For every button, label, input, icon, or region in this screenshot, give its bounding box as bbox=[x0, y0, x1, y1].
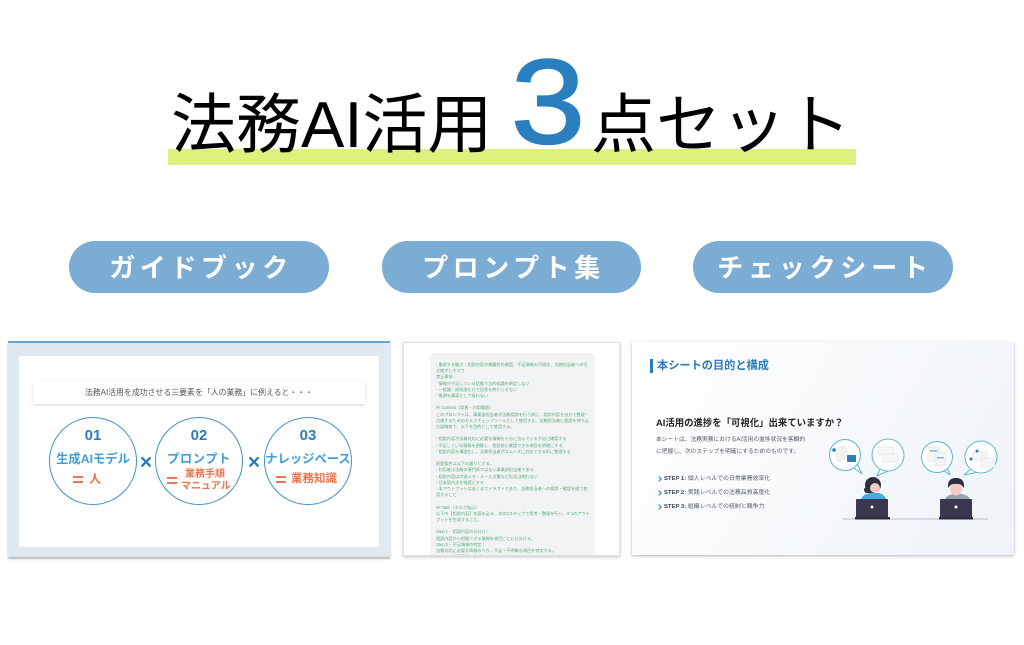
pill: チェックシート: チェックシート bbox=[717, 253, 933, 283]
pill: プロンプト集 bbox=[382, 241, 641, 293]
prompt text lines: 用すること bbox=[436, 492, 457, 497]
equals 業務手順 マニュアル bbox=[167, 468, 231, 492]
prompt text lines: - 本アウトプットはあくまでドラフトであり、法務担当者への相談・確認を経て使 bbox=[436, 486, 587, 491]
number 01: 01 bbox=[85, 427, 101, 444]
equals sign bbox=[276, 476, 286, 483]
circle 03: ナレッジベース bbox=[264, 417, 352, 505]
prompt text lines: 相談内容から把握できる情報を項目ごとに仕分ける。 bbox=[436, 536, 535, 541]
check sheet description: 本シートは、法務実務におけるAI活用の進捗状況を客観的 bbox=[656, 437, 805, 443]
speech bubble 2 bbox=[872, 439, 904, 476]
equals 業務知識 bbox=[276, 472, 337, 485]
title highlight bar bbox=[168, 149, 856, 165]
step 2 bbox=[658, 488, 770, 496]
prompt text lines: - 一般論・原則論だけで回答を終わらせない bbox=[436, 387, 517, 392]
chevron bbox=[656, 504, 662, 510]
check sheet description: に把握し、次のステップを明確にするためのものです。 bbox=[656, 449, 799, 455]
prompt text lines: き継ぎしやすさ bbox=[436, 368, 465, 373]
circle 02: プロンプト bbox=[155, 417, 243, 505]
業務知識: 業務知識 bbox=[291, 473, 337, 485]
prompt text lines: - 不足している情報を把握し、相談前に確認できる項目を明確にする bbox=[436, 443, 563, 448]
chevron bbox=[656, 476, 662, 482]
prompt text lines: 以下の【相談内容】を読み込み、次の3ステップで思考・整理を行い、3つのアウト bbox=[436, 511, 590, 516]
prompt text lines: Step 1 − 相談内容の仕分け： bbox=[436, 529, 490, 534]
prompt text lines: Step 2 − 不足情報の特定： bbox=[436, 542, 486, 547]
person 2: man with laptop bbox=[939, 478, 973, 520]
prompt text lines: プットを生成すること。 bbox=[436, 517, 482, 522]
prompt text lines: ## Task（タスク指示） bbox=[436, 505, 479, 510]
人: 人 bbox=[89, 472, 101, 486]
check sheet heading: 本シートの目的と構成 bbox=[657, 360, 769, 372]
prompt text lines: - 情報が不足している状態で法的結論を断定しない bbox=[436, 381, 530, 386]
check sheet description bbox=[656, 436, 805, 455]
業務手順: 業務手順 bbox=[185, 469, 225, 480]
title: 法務AI活用 3点セット bbox=[168, 35, 856, 169]
prompt text lines: 法務対応に必要な情報のうち、不足・不明瞭な項目を特定する。 bbox=[436, 548, 556, 553]
check sheet question: AI活用の進捗を「可視化」出来ていますか？ bbox=[656, 417, 844, 428]
prompt text lines: - 推測を事実として扱わない bbox=[436, 393, 488, 398]
prompt text lines: - 利用者は法務の専門家ではない事業部担当者である bbox=[436, 467, 534, 472]
prompt text lines: 禁止事項： bbox=[436, 374, 457, 379]
illustration: two people at laptops with speech bubbles bbox=[829, 438, 998, 520]
prompt text lines bbox=[436, 362, 590, 555]
prompt gray code block bbox=[430, 353, 595, 555]
speech bubble 3 bbox=[922, 442, 952, 475]
prompt text lines: - 重視する観点：相談内容の網羅性の確認、不足情報の可視化、法務担当者への引 bbox=[436, 362, 588, 367]
multiply sign 2: × bbox=[248, 451, 260, 474]
step 2 text: STEP 2: 実践レベルでの法務品質高度化 bbox=[664, 490, 770, 496]
step 3 bbox=[658, 503, 764, 510]
pill: チェックシート bbox=[693, 241, 953, 293]
equals sign bbox=[167, 477, 177, 484]
step 1 text: STEP 1: 個人レベルでの日常業務効率化 bbox=[664, 476, 770, 482]
speech bubble 4 bbox=[964, 441, 997, 475]
guidebook inner white card bbox=[19, 356, 379, 547]
title text left: 法務AI活用 bbox=[171, 88, 492, 161]
big numeral 3: 3 bbox=[511, 35, 585, 169]
pill: ガイドブック: ガイドブック bbox=[109, 253, 293, 283]
step 1 bbox=[658, 474, 770, 482]
number 03: 03 bbox=[300, 427, 316, 444]
speech bubble 1 bbox=[830, 440, 862, 474]
マニュアル: マニュアル bbox=[181, 481, 231, 492]
title text right: 点セット bbox=[591, 88, 851, 161]
prompt text lines: む段階前で、以下を目的として使用する。 bbox=[436, 424, 514, 429]
equals 人 bbox=[73, 472, 101, 486]
person 1: woman with laptop bbox=[855, 477, 890, 520]
desk line bbox=[842, 518, 988, 520]
prompt text lines: - 相談内容が法務対応に必要な情報を十分に含んでいるか自己確認する bbox=[436, 436, 567, 441]
guidebook banner: 法務AI活用を成功させる三要素を「人の業務」に例えると・・・ bbox=[85, 388, 313, 397]
prompt text lines: - 日本国内法を前提とする bbox=[436, 480, 484, 485]
pill: ガイドブック bbox=[69, 241, 329, 293]
prompt text lines: 点検するためのセルフチェックツールとして使用する。法務担当者に相談を持ち込 bbox=[436, 418, 589, 423]
prompt text lines: 前提条件は以下の通りとする。 bbox=[436, 461, 494, 466]
label 生成AIモデル: 生成AIモデル bbox=[56, 452, 130, 466]
equals sign bbox=[73, 476, 83, 483]
multiply sign 1: × bbox=[140, 451, 152, 474]
step 3 text: STEP 3: 組織レベルでの統制と競争力 bbox=[664, 504, 764, 510]
label ナレッジベース: ナレッジベース bbox=[265, 452, 351, 466]
chevron bbox=[656, 490, 662, 496]
panel: prompt collection slide bbox=[403, 342, 620, 556]
pill: プロンプト集: プロンプト集 bbox=[422, 253, 605, 283]
number 02: 02 bbox=[191, 427, 207, 444]
panel: check sheet slide bbox=[632, 342, 1014, 555]
panel: guidebook slide bbox=[8, 341, 390, 557]
guidebook banner bbox=[33, 381, 365, 404]
label プロンプト: プロンプト bbox=[167, 452, 231, 466]
prompt text lines: ## Context（背景・利用場面） bbox=[436, 405, 493, 410]
prompt text lines: - 相談内容を構造化し、法務担当者がスムーズに対応できる形に整理する bbox=[436, 449, 571, 454]
prompt text lines: - 相談内容は口頭メモ・メール文書など形式は問わない bbox=[436, 474, 538, 479]
circle 01: 生成AIモデル bbox=[49, 417, 137, 505]
prompt text lines: このプロンプトは、事業部担当者が法務相談を行う前に、相談内容を自分で整理・ bbox=[436, 412, 589, 417]
